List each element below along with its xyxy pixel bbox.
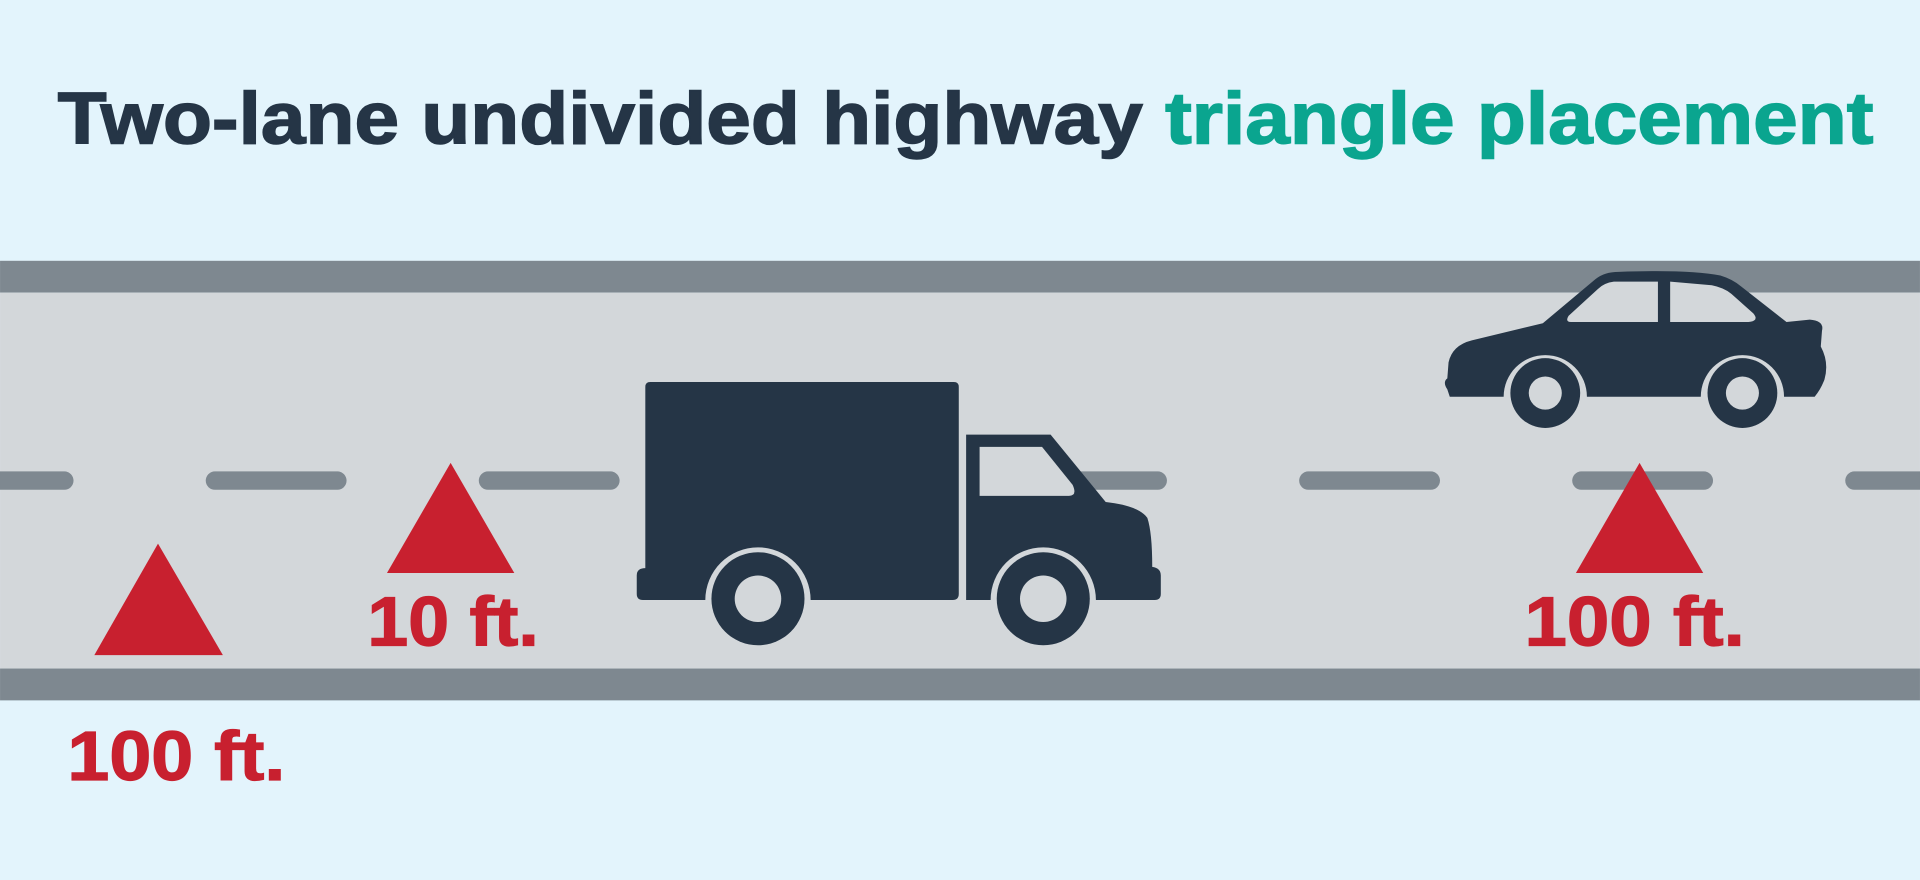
title: Two-lane undivided highway triangle placement xyxy=(58,76,1873,159)
icon: car xyxy=(1445,271,1826,428)
icon: triangle near truck xyxy=(387,463,514,573)
icon: triangle far left xyxy=(94,544,223,655)
road xyxy=(0,261,1920,700)
label: 100 ft bottom: 100 ft. xyxy=(67,717,285,795)
label: 10 ft: 10 ft. xyxy=(367,582,539,660)
label: 100 ft right: 100 ft. xyxy=(1524,582,1745,660)
icon: triangle right xyxy=(1576,463,1703,573)
icon: truck xyxy=(637,382,1161,645)
